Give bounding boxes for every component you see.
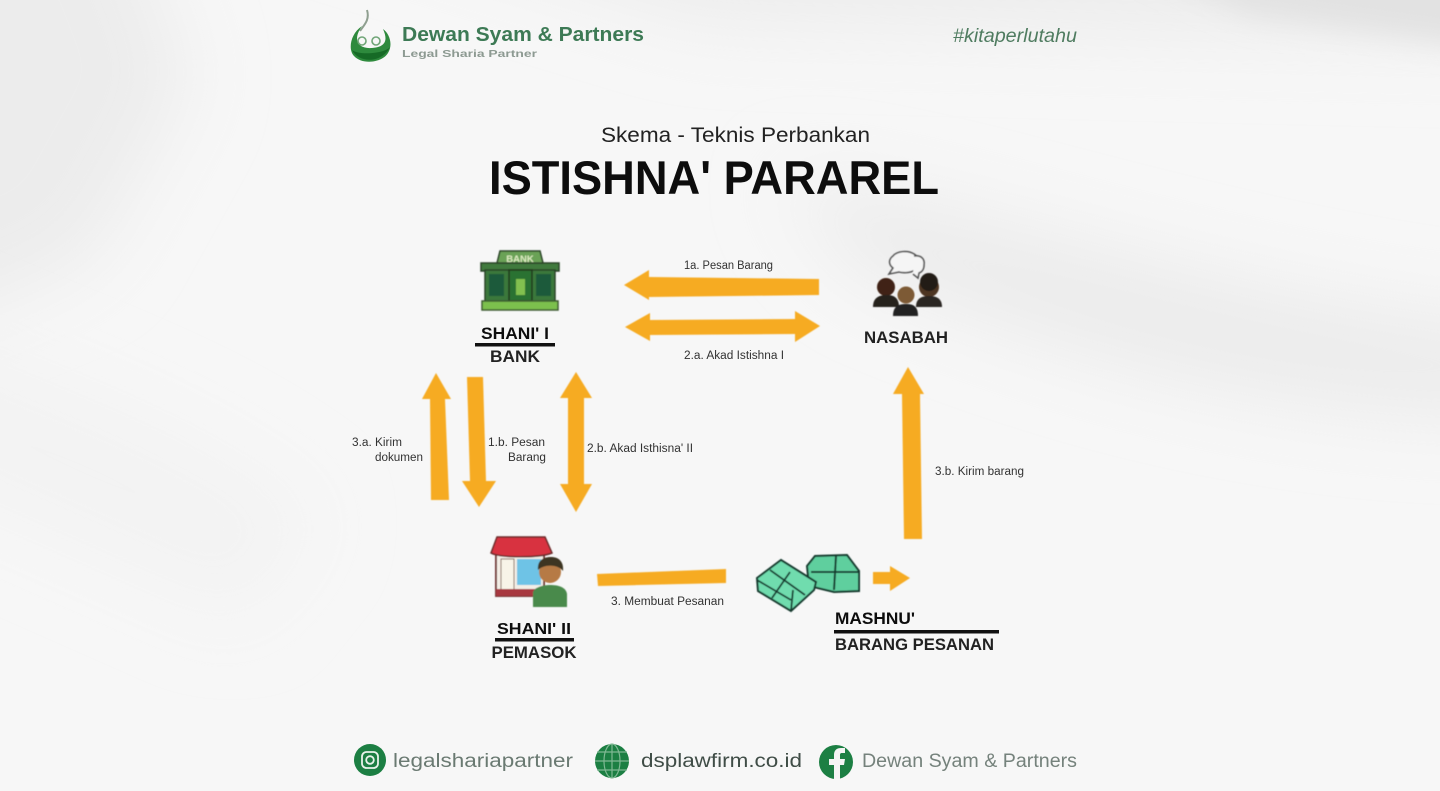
arrow: 3 Membuat Pesanan bbox=[597, 569, 726, 586]
icon: shop with seller bbox=[491, 537, 567, 607]
instagram handle: legalshariapartner bbox=[393, 751, 574, 772]
node: Shani' II supplier bbox=[491, 537, 577, 662]
label: 1b second line: Barang bbox=[508, 452, 546, 464]
arrow: 2b Akad Istishna II bbox=[560, 372, 592, 512]
label: 3a second line: dokumen bbox=[375, 452, 423, 464]
subtitle: Skema - Teknis Perbankan bbox=[601, 124, 870, 147]
brand tagline: Legal Sharia Partner bbox=[402, 48, 537, 60]
label: 3a: 3.a. Kirim bbox=[352, 437, 402, 449]
logo: Dewan Syam & Partners bbox=[351, 10, 644, 62]
label: 1b: 1.b. Pesan bbox=[488, 437, 545, 449]
node: Mashnu' goods bbox=[757, 555, 999, 654]
label: Shani' II: SHANI' II bbox=[497, 621, 571, 638]
node: Shani' I bank bbox=[475, 251, 559, 366]
facebook name: Dewan Syam & Partners bbox=[862, 751, 1077, 772]
brand name: Dewan Syam & Partners bbox=[402, 24, 644, 46]
icon: parcels bbox=[757, 555, 859, 611]
label: Mashnu': MASHNU' bbox=[835, 610, 915, 628]
label: 1a: 1a. Pesan Barang bbox=[684, 260, 773, 272]
label: Barang Pesanan: BARANG PESANAN bbox=[835, 636, 994, 654]
arrows bbox=[422, 270, 924, 591]
icon: customers group bbox=[873, 252, 942, 316]
node: Nasabah bbox=[864, 252, 948, 347]
arrow: 1b Pesan Barang bbox=[462, 377, 496, 507]
label: Bank: BANK bbox=[490, 348, 540, 366]
label: 3: 3. Membuat Pesanan bbox=[611, 596, 724, 608]
icon: globe bbox=[595, 744, 629, 778]
label: Shani' I: SHANI' I bbox=[481, 325, 549, 343]
arrow: 3a Kirim dokumen bbox=[422, 373, 451, 500]
icon: facebook bbox=[819, 745, 853, 779]
website: dsplawfirm.co.id bbox=[641, 751, 802, 772]
arrow: 3b Kirim barang bbox=[893, 367, 924, 539]
icon: instagram bbox=[354, 744, 386, 776]
logo emblem bbox=[351, 10, 390, 62]
arrow: 1a Pesan Barang bbox=[624, 270, 819, 300]
arrow: 2a Akad Istishna I bbox=[625, 311, 820, 342]
label: Pemasok: PEMASOK bbox=[492, 644, 577, 662]
label: 2b: 2.b. Akad Isthisna' II bbox=[587, 443, 693, 455]
title: ISTISHNA' PARAREL bbox=[489, 151, 939, 204]
hashtag: #kitaperlutahu bbox=[953, 26, 1077, 47]
icon: bank building: BANK bbox=[506, 254, 534, 265]
arrow: small to delivery bbox=[873, 566, 910, 591]
label: 3b: 3.b. Kirim barang bbox=[935, 466, 1024, 478]
label: Nasabah: NASABAH bbox=[864, 328, 948, 347]
label: 2a: 2.a. Akad Istishna I bbox=[684, 350, 784, 362]
footer bbox=[354, 744, 1077, 779]
